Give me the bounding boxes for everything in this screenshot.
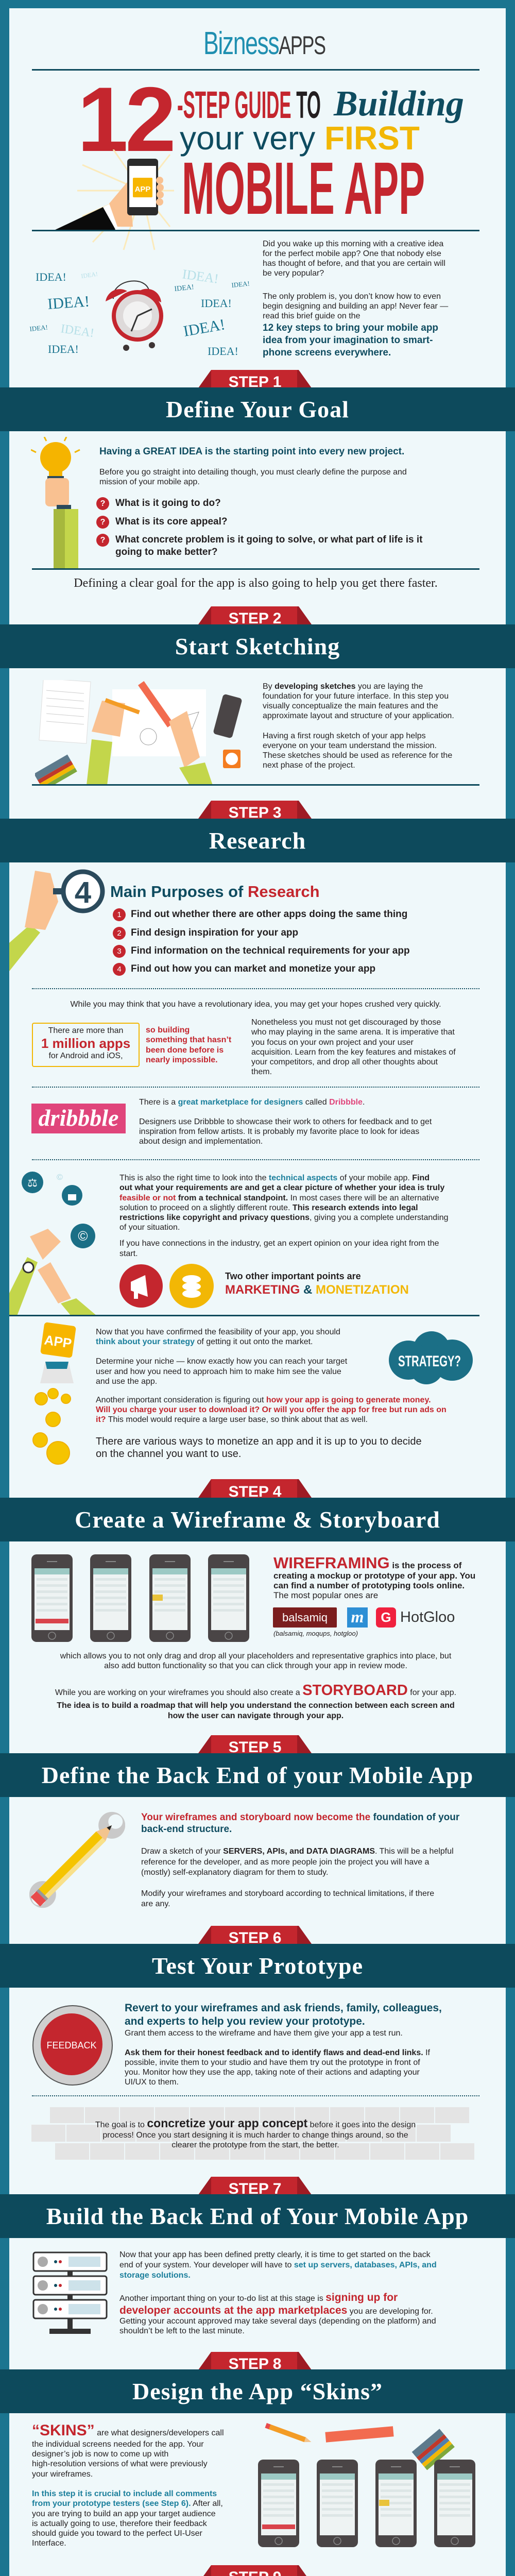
- intro text: 12 key steps to bring your mobile app: [263, 323, 438, 333]
- step 8 text: you are trying to build an app your target audience: [32, 2510, 216, 2518]
- questions list: ?: [100, 518, 105, 527]
- callout red text: nearly impossible.: [146, 1056, 218, 1064]
- step 7 heading band: [0, 2194, 515, 2238]
- step 6 heading band: Test Your Prototype: [152, 1953, 363, 1979]
- storyboard paragraph: [55, 1682, 456, 1720]
- title: building: Building: [334, 84, 464, 124]
- technical aspects text: restrictions like copyright and privacy questions, giving you a complete understanding: [119, 1213, 449, 1222]
- technical aspects text: start.: [119, 1249, 138, 1258]
- logos: prototyping tools: [273, 1607, 455, 1628]
- step 2 text: foundation for your future interface. In this step you: [263, 692, 449, 701]
- step 5 text: reference for the developer, and as more people join the project you will have a: [141, 1858, 429, 1866]
- step 8 text: high-resolution versions of what were previously: [32, 2460, 208, 2468]
- questions list: What is its core appeal?: [115, 516, 228, 527]
- step 7 text: [119, 2250, 480, 2337]
- step 7 tab: [198, 2177, 312, 2195]
- step 2 text: next phase of the project.: [263, 761, 355, 770]
- competitors text: who may playing in the same arena. It is imperative that: [251, 1028, 455, 1037]
- step 7 text: shouldn’t be left to the last minute.: [119, 2327, 245, 2335]
- step 2 text: These sketches should be used as reference for the: [263, 751, 452, 760]
- intro text: read this brief guide on the: [263, 312, 360, 320]
- research purposes: Main Purposes of Research: [110, 883, 320, 901]
- illustration: legal icons with hand: ⚖: [27, 1176, 38, 1189]
- questions list: going to make better?: [115, 547, 217, 557]
- step 5 text: [141, 1812, 459, 1908]
- wireframing text: [273, 1554, 475, 1600]
- step 1 text: [96, 446, 422, 557]
- caption: (balsamiq, moqups, hotgloo): [273, 1630, 358, 1637]
- research purposes: 1: [117, 910, 122, 919]
- callout red text: been done before is: [146, 1046, 224, 1055]
- step 5 text: (mostly) self-explanatory diagram for them to study.: [141, 1868, 328, 1877]
- wireframing text: can find a number of prototyping tools online.: [273, 1581, 465, 1590]
- research purposes: Find information on the technical requirements for your app: [131, 945, 410, 956]
- step 8 text: Interface.: [32, 2539, 66, 2548]
- dribbble text: about design and implementation.: [139, 1137, 263, 1146]
- icon: servers: [32, 2251, 108, 2336]
- illustration: alarm clock with ideas: IDEA!: [182, 316, 227, 340]
- strategy text: on the channel you want to use.: [96, 1448, 241, 1460]
- marketing text: Two other important points are: [225, 1271, 361, 1281]
- intro text: The only problem is, you don’t know how to even: [263, 292, 441, 301]
- questions list: ?: [100, 499, 105, 508]
- callout red text: something that hasn’t: [146, 1036, 231, 1044]
- storyboard paragraph: The idea is to build a roadmap that will help you understand the connection between each screen and: [57, 1701, 455, 1710]
- research purposes: Find out whether there are other apps doing the same thing: [131, 909, 407, 920]
- step 6 text: and experts to help you review your prototype.: [125, 2015, 365, 2027]
- step 5 text: Draw a sketch of your SERVERS, APIs, and DATA DIAGRAMS. This will be a helpful: [141, 1847, 454, 1856]
- competitors text: them.: [251, 1067, 272, 1076]
- icon: magnifier with 4: 4: [75, 876, 91, 909]
- competitors text: acquisition. Learn from the key features and mistakes of: [251, 1048, 456, 1057]
- step 1 tab: [199, 370, 311, 388]
- storyboard paragraph: While you are working on your wireframes you should also create a STORYBOARD for your app.: [55, 1682, 456, 1699]
- icon: magnifier with 4: [9, 870, 105, 971]
- step 2 text: By developing sketches you are laying the: [263, 682, 423, 691]
- icon: pencil and wrench: [29, 1811, 125, 1908]
- marketing text: MARKETING & MONETIZATION: [225, 1283, 409, 1297]
- research purposes: Find design inspiration for your app: [131, 927, 298, 938]
- competitors text: your competitors, and drop all other thoughts about: [251, 1058, 438, 1066]
- illustration: legal icons with hand: ©: [78, 1228, 88, 1244]
- step 5 text: Your wireframes and storyboard now become the foundation of your: [141, 1812, 459, 1823]
- step 3 heading band: Research: [209, 827, 306, 854]
- step 2 text: Having a first rough sketch of your app helps: [263, 732, 426, 740]
- wireframing text: creating a mockup or prototype of your app. You: [273, 1571, 475, 1581]
- callout: 1 million apps: 1 million apps: [41, 1036, 130, 1051]
- callout: 1 million apps: [32, 1023, 140, 1067]
- competitors text: Nonetheless you must not get discouraged by those: [251, 1018, 441, 1027]
- strategy text: and use the app.: [96, 1377, 157, 1386]
- icon: feedback button: [32, 2005, 113, 2086]
- step 8 heading band: [0, 2369, 515, 2413]
- storyboard paragraph: how the user can navigate through your app.: [168, 1711, 344, 1720]
- strategy text: Determine your niche — know exactly how you can reach your target: [96, 1357, 347, 1366]
- technical aspects text: [119, 1174, 449, 1258]
- wireframing text: WIREFRAMING is the process of: [273, 1554, 461, 1572]
- step 5 heading band: Define the Back End of your Mobile App: [42, 1762, 473, 1788]
- title: [77, 72, 464, 230]
- step 8 text: “SKINS” are what designers/developers call: [32, 2422, 224, 2439]
- step 1 heading band: [0, 387, 515, 431]
- questions list: ?: [100, 536, 105, 545]
- step 4 heading band: Create a Wireframe & Storyboard: [75, 1506, 440, 1533]
- step 6 text: Ask them for their honest feedback and to identify flaws and dead-end links. If: [125, 2048, 430, 2057]
- research purposes: Find out how you can market and monetize your app: [131, 963, 375, 974]
- step 8 tab: [198, 2352, 312, 2370]
- step 6 text: Grant them access to the wireframe and have them give your app a test run.: [125, 2029, 403, 2038]
- step 2 text: everyone on your team understand the mission.: [263, 741, 437, 750]
- step 5 text: are any.: [141, 1900, 170, 1908]
- step 7 text: end of your system. Your developer will have to set up servers, databases, APIs, and: [119, 2261, 437, 2269]
- research purposes: 3: [117, 947, 122, 956]
- step 6 tab: [198, 1926, 312, 1944]
- illustration: design tools and skins phones: [258, 2419, 476, 2549]
- step 7 text: Getting your account approved may take several days (depending on the platform) and: [119, 2317, 436, 2326]
- competitors text: [251, 1018, 456, 1076]
- brick wall callout: The goal is to concretize your app concept before it goes into the design: [95, 2116, 416, 2130]
- questions list: What concrete problem is it going to solve, or what part of life is it: [115, 534, 422, 545]
- logos: prototyping tools: G: [381, 1609, 391, 1625]
- illustration: alarm clock with ideas: IDEA!: [201, 297, 232, 310]
- step 1 text: mission of your mobile app.: [99, 478, 200, 486]
- callout red text: so building: [146, 1026, 190, 1035]
- wireframe paragraph: also add button functionality so that you can click through your app in review mode.: [104, 1662, 407, 1670]
- title: your very first: your very FIRST: [180, 120, 420, 157]
- step 7 heading band: Build the Back End of Your Mobile App: [46, 2203, 469, 2229]
- research purposes: 4: [117, 965, 122, 974]
- research intro line: While you may think that you have a revolutionary idea, you may get your hopes crushed very quickly.: [70, 1000, 441, 1009]
- illustration: alarm clock with ideas: IDEA!: [174, 283, 194, 293]
- intro text: idea from your imagination to smart-: [263, 335, 433, 346]
- icons: marketing and monetization: [119, 1264, 214, 1308]
- step 6 text: [125, 2002, 442, 2087]
- step 8 text: from your prototype testers (see Step 6). After all,: [32, 2499, 223, 2508]
- callout red text: [146, 1026, 231, 1064]
- step 3 heading band: [0, 819, 515, 862]
- step 1 text: Having a GREAT IDEA is the starting point into every new project.: [99, 446, 404, 457]
- technical aspects text: solution to proceed on a slightly different route. This research extends into legal: [119, 1204, 418, 1212]
- illustration: app rocket with coins: [32, 1322, 76, 1465]
- wireframe phones: [31, 1554, 249, 1642]
- logos: prototyping tools: m: [351, 1607, 364, 1626]
- illustration: legal icons with hand: ©: [57, 1173, 63, 1182]
- questions list: [96, 497, 422, 557]
- technical aspects text: This is also the right time to look into the technical aspects of your mobile app. Find: [119, 1174, 430, 1182]
- step 7 text: storage solutions.: [119, 2271, 191, 2280]
- strategy text: Will you charge your user to download it? Or will you offer the app for free but run ads on: [96, 1405, 447, 1414]
- brick wall callout: [31, 2107, 474, 2160]
- step 8 text: the individual screens needed for the app. Your: [32, 2440, 204, 2449]
- step 2 text: visually conceptualize the main features and the: [263, 702, 438, 710]
- step 2 text: [263, 682, 454, 770]
- intro text: phone screens everywhere.: [263, 347, 391, 358]
- icon: feedback button: FEEDBACK: [46, 2040, 97, 2050]
- brick wall callout: process! Once you start designing it is much harder to change things around, so the: [102, 2131, 408, 2139]
- illustration: sketching hands: [35, 680, 242, 784]
- step 8 text: In this step it is crucial to include all comments: [32, 2489, 217, 2498]
- brick wall callout: clearer the prototype from the start, the better.: [171, 2141, 339, 2149]
- dribbble text: [139, 1098, 432, 1146]
- step 6 text: possible, invite them to your studio and have them try out the prototype in front of: [125, 2058, 420, 2067]
- strategy text: think about your strategy of getting it out onto the market.: [96, 1337, 313, 1346]
- logo: BiznessAPPS: [203, 26, 325, 61]
- intro text: begin designing and building an app! Never fear —: [263, 302, 448, 311]
- technical aspects text: out what your requirements are and get a clear picture of whether your idea is truly: [119, 1183, 444, 1192]
- illustration: alarm clock with ideas: IDEA!: [29, 323, 48, 333]
- strategy text: [96, 1328, 447, 1460]
- step 5 text: Modify your wireframes and storyboard according to technical limitations, if there: [141, 1889, 434, 1898]
- strategy text: Another important consideration is figuring out how your app is going to generate money.: [96, 1396, 431, 1404]
- illustration: alarm clock with ideas: IDEA!: [36, 270, 66, 283]
- technical aspects text: If you have connections in the industry, get an expert opinion on your idea right from the: [119, 1239, 439, 1248]
- title: step guide to: -STEP GUIDE TO: [177, 83, 321, 126]
- step 7 text: Another important thing on your to-do list at this stage is signing up for: [119, 2292, 398, 2303]
- step 3 tab: [198, 801, 312, 819]
- icon: lightbulb in hand: [31, 437, 80, 568]
- illustration: alarm clock with ideas: [29, 266, 250, 358]
- step 8 text: should guide you toward to the perfect UI-User: [32, 2529, 202, 2538]
- questions list: What is it going to do?: [115, 498, 221, 509]
- intro text: has thought of before, and that you are certain will: [263, 259, 445, 268]
- dribbble text: Designers use Dribbble to showcase their work to others for feedback and to get: [139, 1117, 432, 1126]
- step 5 tab: [198, 1735, 312, 1753]
- step 4 tab: [198, 1479, 312, 1498]
- illustration: alarm clock with ideas: IDEA!: [181, 266, 219, 286]
- step 1 conclusion: Defining a clear goal for the app is also going to help you get there faster.: [74, 577, 438, 590]
- technical aspects text: feasible or not from a technical standpoint. In most cases there will be an alternative: [119, 1194, 439, 1202]
- step 6 heading band: [0, 1944, 515, 1988]
- competitors text: you focus on your own project and your user: [251, 1038, 414, 1047]
- step 7 text: developer accounts at the app marketplaces you are developing for.: [119, 2304, 433, 2316]
- step 6 text: you. Monitor how they use the app, taking note of their actions and adapting your: [125, 2068, 420, 2077]
- illustration: alarm clock with ideas: IDEA!: [80, 270, 98, 280]
- step 2 text: approximate layout and structure of your application.: [263, 711, 454, 720]
- strategy text: user and how you need to approach him to make him see the value: [96, 1367, 341, 1376]
- step 8 text: designer’s job is now to come up with: [32, 2450, 168, 2459]
- title: mobile app: MOBILE APP: [182, 147, 425, 230]
- intro text: be very popular?: [263, 269, 324, 278]
- illustration: alarm clock with ideas: IDEA!: [231, 279, 250, 289]
- illustration: alarm clock with ideas: IDEA!: [47, 293, 90, 313]
- step 8 text: is actually going to use, therefore their feedback: [32, 2519, 207, 2528]
- icon: strategy cloud: [389, 1331, 473, 1384]
- illustration: alarm clock with ideas: IDEA!: [48, 343, 79, 355]
- intro text: for the perfect mobile app? One that nobody else: [263, 249, 441, 258]
- step 6 text: Revert to your wireframes and ask friends, family, colleagues,: [125, 2002, 442, 2014]
- step 7 text: Now that your app has been defined pretty clearly, it is time to get started on the back: [119, 2250, 431, 2259]
- step 4 heading band: [0, 1498, 515, 1541]
- illustration: alarm clock with ideas: IDEA!: [60, 322, 95, 340]
- step 1 heading band: Define Your Goal: [166, 396, 349, 422]
- illustration: alarm clock with ideas: IDEA!: [208, 345, 238, 358]
- step 8 text: [32, 2423, 248, 2549]
- illustration: app rocket with coins: APP: [43, 1332, 73, 1351]
- research purposes: [110, 883, 410, 976]
- step 5 heading band: [0, 1753, 515, 1797]
- research purposes: 2: [117, 929, 122, 938]
- intro text: Did you wake up this morning with a creative idea: [263, 240, 443, 248]
- step 9 tab: [198, 2565, 312, 2576]
- wireframing text: The most popular ones are: [273, 1590, 378, 1600]
- strategy text: There are various ways to monetize an app and it is up to you to decide: [96, 1436, 422, 1447]
- step 1 text: Before you go straight into detailing though, you must clearly define the purpose and: [99, 468, 407, 477]
- logo: dribbble: dribbble: [39, 1105, 118, 1131]
- illustration: hand holding phone: [55, 149, 174, 250]
- strategy text: Now that you have confirmed the feasibility of your app, you should: [96, 1328, 340, 1336]
- wireframe paragraph: which allows you to not only drag and drop all your placeholders and representative graphics into place, but: [60, 1652, 451, 1660]
- wireframe paragraph: [60, 1652, 451, 1670]
- step 2 heading band: [0, 624, 515, 668]
- callout: 1 million apps: There are more than: [48, 1026, 123, 1035]
- step 8 heading band: Design the App “Skins”: [132, 2378, 383, 2404]
- step 2 tab: [198, 606, 312, 624]
- strategy text: it? This model would require a large user base, so think about that as well.: [96, 1415, 368, 1424]
- illustration: legal icons with hand: [9, 1172, 96, 1315]
- marketing text: [225, 1271, 409, 1297]
- step 5 text: back-end structure.: [141, 1824, 232, 1835]
- dribbble text: inspiration from fellow artists. It is probably my favorite place to look for ideas: [139, 1127, 419, 1136]
- step 8 text: your wireframes.: [32, 2470, 93, 2479]
- dribbble text: There is a great marketplace for designers called Dribbble.: [139, 1098, 365, 1107]
- logos: prototyping tools: balsamiq: [282, 1611, 328, 1624]
- step 6 text: UI/UX to them.: [125, 2078, 179, 2087]
- technical aspects text: of your situation.: [119, 1223, 180, 1232]
- step 2 heading band: Start Sketching: [175, 633, 340, 659]
- illustration: hand holding phone: APP: [135, 185, 150, 194]
- intro text: [263, 240, 448, 358]
- callout: 1 million apps: for Android and iOS,: [48, 1052, 123, 1060]
- logos: prototyping tools: HotGloo: [400, 1609, 455, 1625]
